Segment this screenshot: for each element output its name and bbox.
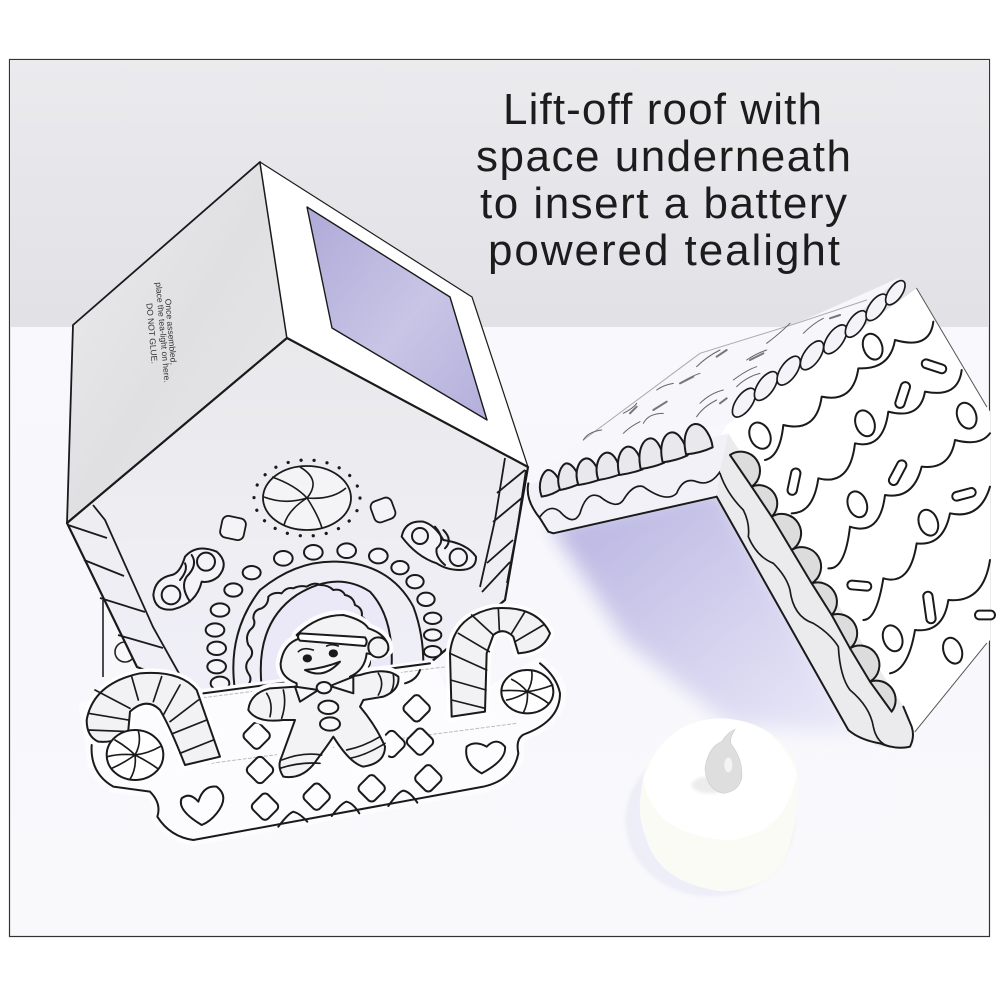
roof back panel xyxy=(540,277,902,473)
candy cane left xyxy=(87,673,220,780)
diamond tiles xyxy=(242,670,443,827)
lower house, pop-up base and figures xyxy=(85,522,560,840)
caption: lift-off roof: powered tealight xyxy=(488,226,840,275)
lift-off roof piece xyxy=(527,277,995,748)
roof right panel xyxy=(720,288,995,732)
striped corner right xyxy=(480,458,526,592)
candy cane right xyxy=(450,608,553,717)
house side wall with assembly note xyxy=(67,162,287,523)
arch door xyxy=(233,562,423,690)
paper house body xyxy=(67,162,528,693)
house top face with window xyxy=(260,162,528,467)
house front wall xyxy=(67,338,528,693)
swirl decorations xyxy=(153,522,476,610)
roof cast shadow xyxy=(550,485,860,735)
roof front edge with icing scallops xyxy=(527,424,728,533)
caption: lift-off roof: to insert a battery xyxy=(480,179,847,228)
back ridge scallops xyxy=(728,277,909,421)
tealight flame xyxy=(705,729,742,793)
roof side edge with scallops xyxy=(717,433,913,748)
hearts xyxy=(181,742,505,825)
striped corner left xyxy=(68,505,181,677)
pop-up base paper xyxy=(85,663,560,840)
peppermint swirl on gable xyxy=(254,460,360,536)
gumdrop decorations xyxy=(219,496,397,541)
house side wall with assembly note: DO NOT GLUE. xyxy=(144,303,160,364)
house side wall with assembly note: place the tea-light on here. xyxy=(154,282,172,383)
arch dots xyxy=(206,543,441,690)
caption: lift-off roof: Lift-off roof with xyxy=(503,85,822,134)
gingerbread man xyxy=(248,615,398,777)
caption: lift-off roof: space underneath xyxy=(476,132,851,181)
house side wall with assembly note: Once assembled, xyxy=(163,298,179,365)
house base tab behind xyxy=(103,600,190,690)
battery tealight xyxy=(625,718,797,897)
